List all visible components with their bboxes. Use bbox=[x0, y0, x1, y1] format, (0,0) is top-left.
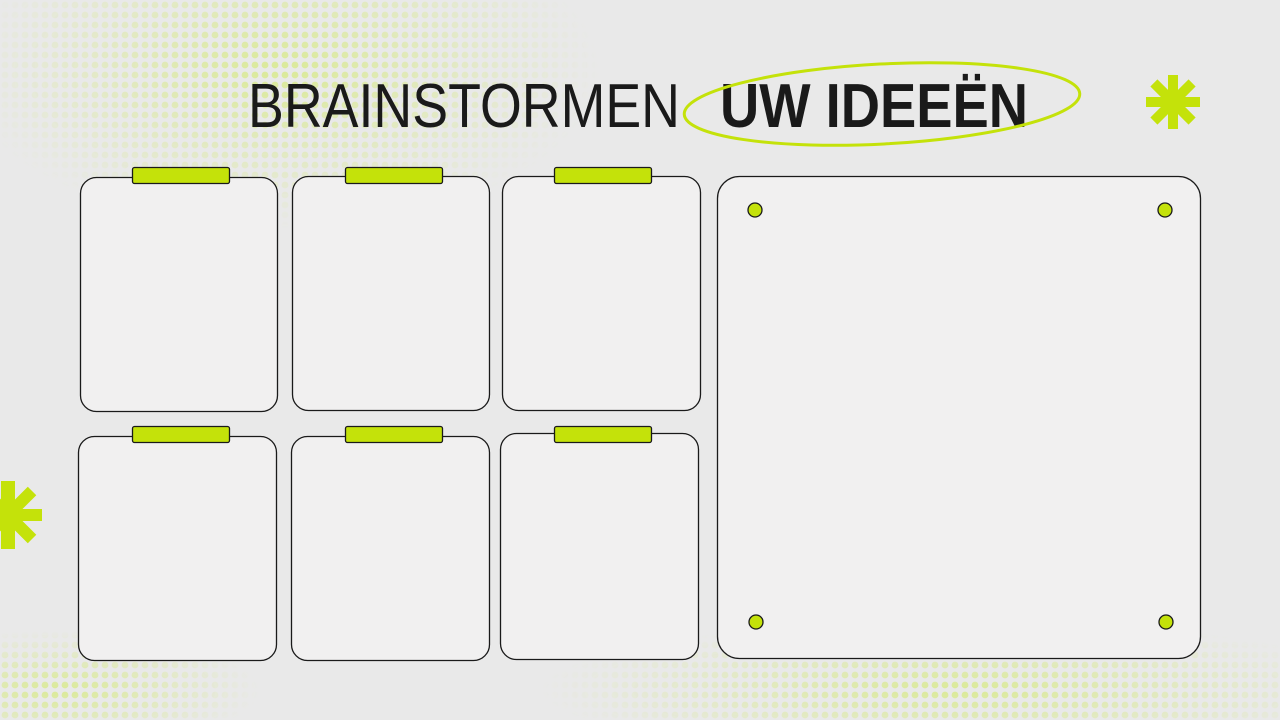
panel: card 5 bbox=[292, 426, 490, 660]
panel: large board bbox=[718, 176, 1200, 658]
icon: asterisk top right bbox=[1146, 75, 1200, 129]
title bbox=[248, 54, 1082, 154]
title: UW IDEEËN bbox=[720, 72, 1028, 141]
panel: card 4 bbox=[78, 426, 276, 660]
panel: card 1 bbox=[80, 168, 278, 412]
panel: card 6 bbox=[500, 426, 698, 660]
panel: card 2 bbox=[292, 168, 490, 410]
panel: card 3 bbox=[502, 168, 700, 410]
icon: asterisk left bbox=[0, 481, 42, 549]
title: BRAINSTORMEN bbox=[248, 72, 680, 141]
